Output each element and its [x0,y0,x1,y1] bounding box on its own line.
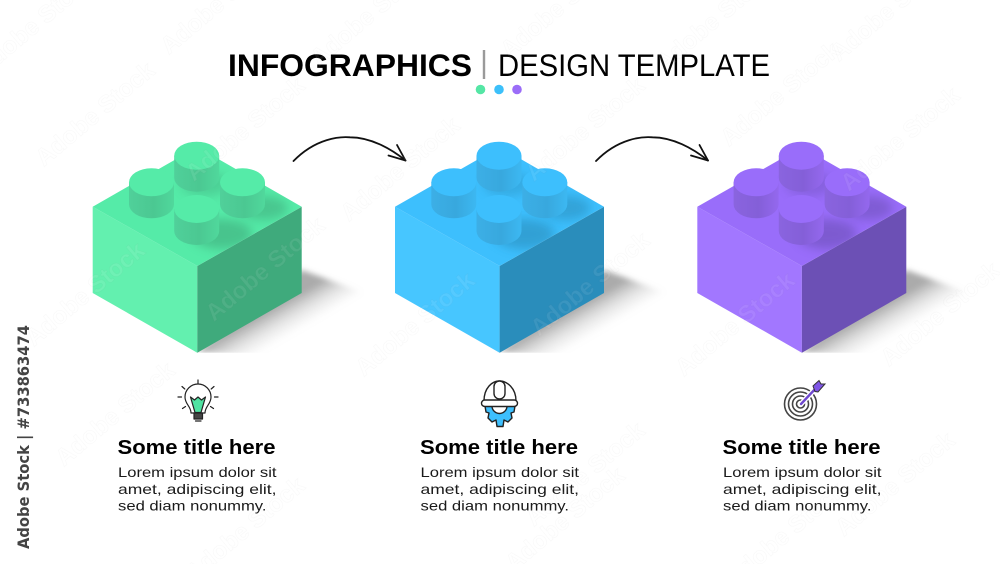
watermark: Adobe Stock [520,416,651,532]
brick: green [93,142,362,356]
watermark: Adobe Stock [830,426,961,542]
icon: light bulb [178,380,218,421]
column text: green: amet, adipiscing elit, [118,481,276,497]
column text: blue: amet, adipiscing elit, [420,481,579,497]
watermark: Adobe Stock [835,81,966,197]
column text: purple: Lorem ipsum dolor sit [723,464,882,480]
column text: purple: Some title here [722,437,880,459]
watermark: Adobe Stock [20,236,151,352]
watermark: Adobe Stock [180,71,311,187]
brick: blue [395,142,664,356]
watermark: Adobe Stock [200,211,331,327]
title [228,47,770,83]
title: INFOGRAPHICS [228,47,472,83]
column text: blue [420,437,579,514]
arrow: blue to purple [596,137,708,161]
watermark: Adobe Stock [50,356,181,472]
stock id side label: Adobe Stock | #733863474 [14,325,34,549]
brick: purple [697,142,967,356]
icon: target with arrow [784,380,825,420]
title: DESIGN TEMPLATE [498,47,770,83]
watermark: Adobe Stock [520,71,651,187]
column text: green [118,437,277,514]
column text: green: Some title here [118,437,276,459]
watermark: Adobe Stock [670,266,801,382]
watermark: Adobe Stock [30,56,161,172]
column text: green: sed diam nonummy. [118,498,266,514]
column text: blue: sed diam nonummy. [420,498,569,514]
column text: blue: Some title here [420,437,578,459]
watermark: Adobe Stock [350,266,481,382]
watermark: Adobe Stock [525,226,656,342]
column text: blue: Lorem ipsum dolor sit [420,464,579,480]
column text: green: Lorem ipsum dolor sit [118,464,277,480]
icon: helmet and gear [482,381,518,426]
column text: purple [722,437,882,514]
watermark: Adobe Stock [335,111,466,227]
column text: purple: sed diam nonummy. [723,498,872,514]
arrow: green to blue [294,137,406,161]
watermark: Adobe Stock [715,36,846,152]
title dots [476,85,522,94]
column text: purple: amet, adipiscing elit, [723,481,882,497]
